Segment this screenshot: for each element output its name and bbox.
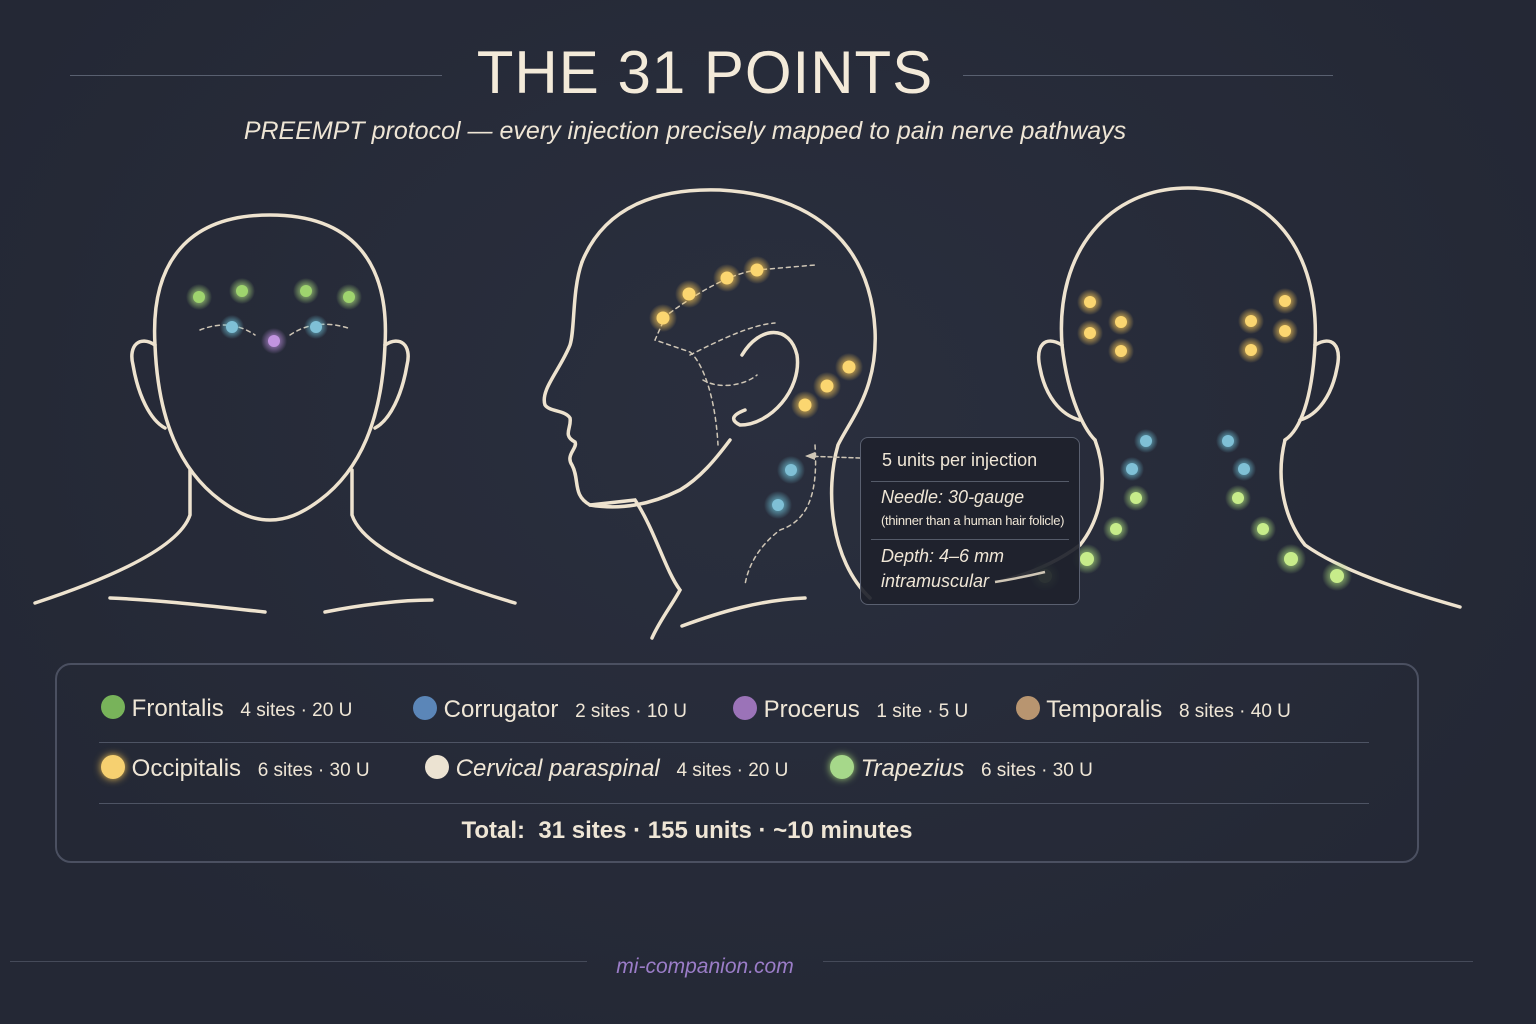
legend: Cervical paraspinal: Cervical paraspinal 4 sites · 20 U [456, 755, 788, 782]
footer [10, 961, 587, 962]
legend: Occipitalis [95, 749, 370, 785]
callout: injection details: Needle: 30-gauge [881, 487, 1024, 507]
subtitle: PREEMPT protocol — every injection precisely mapped to pain nerve pathways [244, 117, 1126, 145]
legend panel [55, 663, 1419, 863]
legend: Temporalis: Temporalis 8 sites · 40 U [1046, 696, 1291, 723]
figure: front head [35, 215, 515, 612]
injection dots [186, 256, 1352, 591]
text: mi-companion.com [616, 955, 794, 978]
callout: injection details: Depth: 4–6 mm [881, 546, 1004, 566]
total: Total: 31 sites · 155 units · ~10 minutes [461, 817, 913, 844]
legend: Frontalis: Frontalis 4 sites · 20 U [132, 695, 352, 722]
legend: Trapezius [824, 750, 1093, 784]
legend: Procerus: Procerus 1 site · 5 U [764, 696, 968, 723]
callout: injection details: 5 units per injection [882, 450, 1037, 470]
callout: injection details: intramuscular [881, 571, 989, 591]
legend: Occipitalis: Occipitalis 6 sites · 30 U [132, 755, 370, 782]
callout: injection details [860, 437, 1080, 605]
callout: injection details: (thinner than a human hair folicle) [881, 513, 1064, 528]
figure: back head [1005, 188, 1460, 607]
figure: profile head [544, 190, 875, 638]
title: THE 31 POINTS [477, 39, 933, 106]
legend: Corrugator: Corrugator 2 sites · 10 U [444, 696, 687, 723]
legend: Trapezius: Trapezius 6 sites · 30 U [861, 755, 1093, 782]
